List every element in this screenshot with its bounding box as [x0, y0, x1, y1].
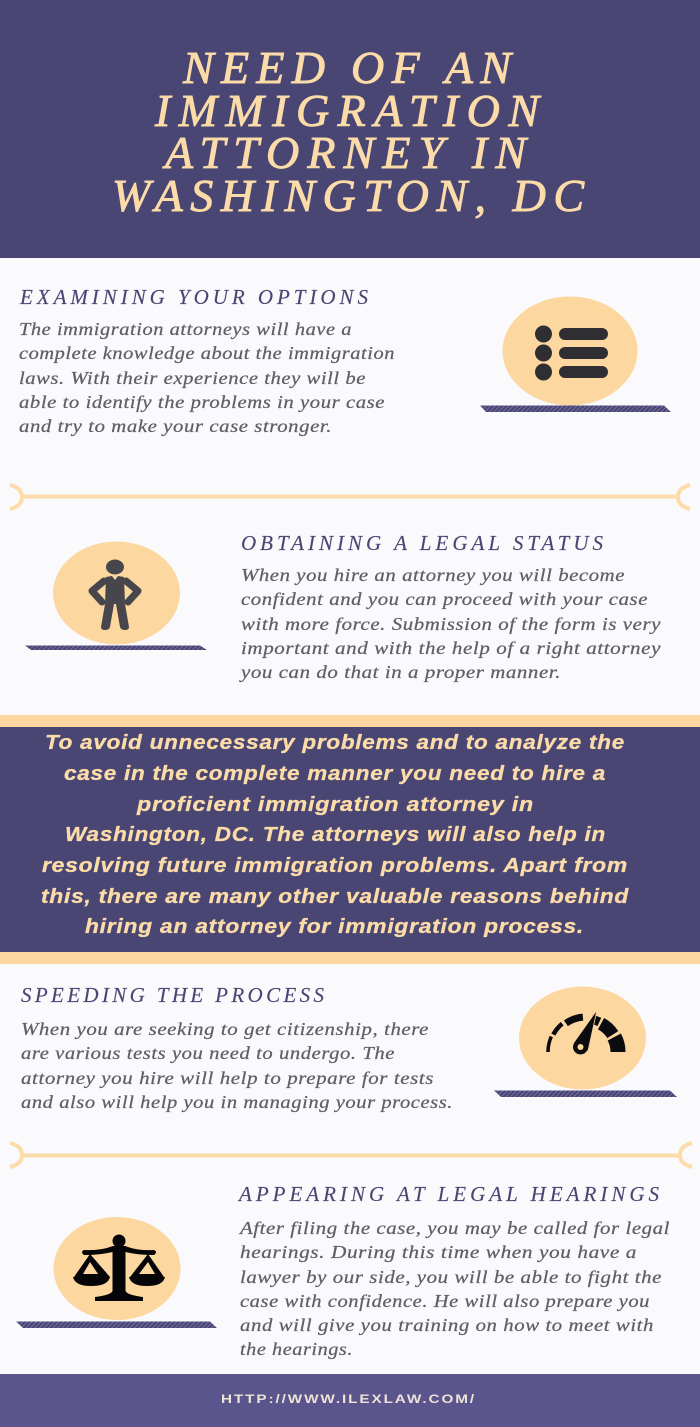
text block: [19, 319, 395, 436]
heading: SPEEDING THE PROCESS: [21, 983, 324, 1007]
text block: case with confidence. He will also prepare you: [240, 1291, 650, 1311]
summary text: Washington, DC. The attorneys will also help in: [65, 823, 606, 846]
text block: able to identify the problems in your case: [19, 392, 385, 412]
text block: you can do that in a proper manner.: [239, 662, 561, 682]
text block: are various tests you need to undergo. The: [21, 1043, 395, 1063]
title: ATTORNEY IN: [162, 127, 528, 178]
heading: EXAMINING YOUR OPTIONS: [19, 285, 368, 309]
title: [112, 42, 585, 221]
divider one: [10, 485, 690, 509]
panel: summary banner: [0, 715, 700, 964]
text block: [21, 1019, 453, 1112]
text block: After filing the case, you may be called for legal: [239, 1218, 670, 1238]
text block: complete knowledge about the immigration: [19, 343, 395, 363]
panel: appearing at legal hearings: [16, 1182, 670, 1359]
summary text: proficient immigration attorney in: [136, 793, 534, 816]
footer: [0, 1374, 700, 1427]
panel: speeding the process: [21, 983, 677, 1112]
text block: and try to make your case stronger.: [19, 416, 332, 436]
title: NEED OF AN: [182, 42, 513, 93]
title: WASHINGTON, DC: [112, 170, 585, 221]
panel: obtaining a legal status: [25, 531, 661, 682]
text block: [239, 1218, 670, 1359]
title banner: [0, 0, 700, 258]
divider two: [10, 1143, 692, 1167]
icon: scales: [16, 1217, 217, 1328]
text block: laws. With their experience they will be: [19, 368, 366, 388]
text block: the hearings.: [240, 1339, 353, 1359]
summary text: resolving future immigration problems. Apart from: [42, 854, 628, 877]
summary text: hiring an attorney for immigration process.: [85, 915, 584, 938]
text block: [239, 565, 661, 682]
summary text: [41, 731, 629, 938]
text block: When you are seeking to get citizenship, there: [21, 1019, 429, 1039]
text block: When you hire an attorney you will become: [241, 565, 625, 585]
text block: attorney you hire will help to prepare for tests: [21, 1068, 434, 1088]
summary text: To avoid unnecessary problems and to analyze the: [45, 731, 625, 754]
icon: gauge: [494, 986, 677, 1097]
text block: confident and you can proceed with your case: [241, 589, 648, 609]
text block: and will give you training on how to meet with: [240, 1315, 654, 1335]
heading: OBTAINING A LEGAL STATUS: [241, 531, 604, 555]
title: IMMIGRATION: [154, 85, 541, 136]
summary text: this, there are many other valuable reasons behind: [41, 885, 629, 908]
text block: important and with the help of a right attorney: [241, 638, 661, 658]
text block: lawyer by our side, you will be able to fight the: [240, 1267, 662, 1287]
text block: with more force. Submission of the form is very: [241, 614, 661, 634]
text block: and also will help you in managing your process.: [21, 1092, 453, 1112]
panel: examining your options: [19, 285, 671, 436]
text block: The immigration attorneys will have a: [19, 319, 352, 339]
summary text: case in the complete manner you need to hire a: [64, 762, 606, 785]
footer url: HTTP://WWW.ILEXLAW.COM/: [221, 1392, 476, 1406]
icon: list: [480, 296, 671, 412]
heading: APPEARING AT LEGAL HEARINGS: [237, 1182, 660, 1206]
icon: person: [25, 542, 207, 650]
text block: hearings. During this time when you have a: [240, 1242, 637, 1262]
